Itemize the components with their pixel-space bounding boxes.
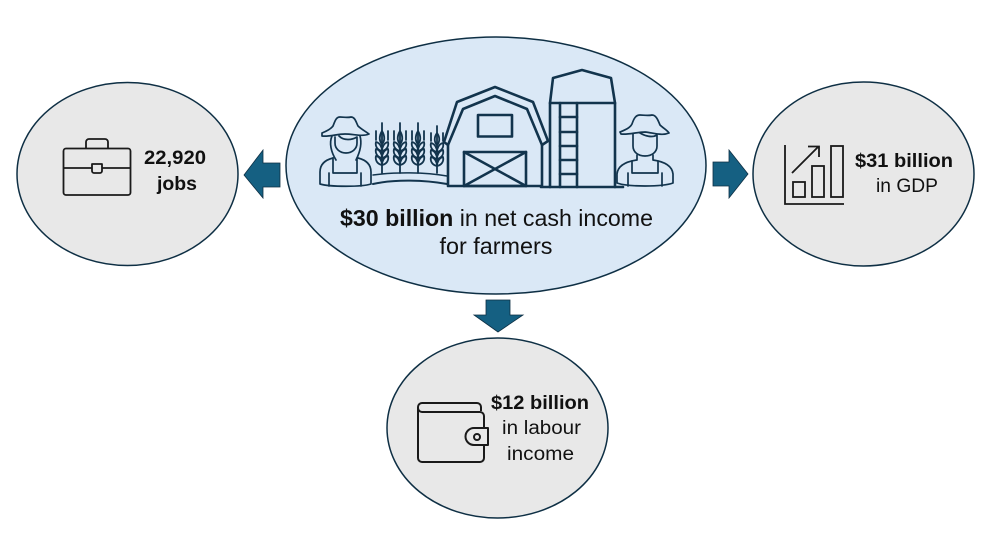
- icon: female farmer: [320, 117, 371, 186]
- text: net cash income: for farmers: [440, 233, 552, 259]
- icon: farm scene: [320, 70, 673, 187]
- arrow: right: [713, 150, 748, 198]
- icon: male farmer: [617, 115, 673, 186]
- panel: labour income: [387, 338, 608, 518]
- text: net cash income: [340, 205, 653, 259]
- panel: net cash income: [286, 37, 706, 294]
- wheat stalk 1: [376, 123, 388, 173]
- text: labour income stat: [491, 393, 589, 465]
- icon: silo: [541, 70, 623, 187]
- text: labour income stat: in labour: [502, 418, 582, 439]
- wheat stalk 2: [394, 123, 406, 173]
- text: jobs stat: 22,920: [144, 148, 206, 169]
- text: GDP stat: in GDP: [876, 176, 938, 197]
- text: labour income stat: $12 billion: [491, 393, 589, 414]
- arrow: down: [474, 300, 523, 332]
- text: labour income stat: income: [507, 444, 574, 465]
- arrow: left: [244, 150, 280, 198]
- icon: briefcase: [64, 139, 130, 195]
- panel: jobs: [17, 82, 238, 266]
- text: jobs stat: [144, 148, 206, 195]
- icon: bar chart: [785, 145, 844, 204]
- icon: barn: [444, 87, 548, 186]
- text: net cash income: $30 billion in net cash income: [340, 205, 653, 231]
- wheat stalk 4: [431, 126, 443, 173]
- text: jobs stat: jobs: [156, 174, 197, 195]
- icon: wallet: [418, 403, 488, 462]
- text: GDP stat: [855, 151, 953, 197]
- wheat stalk 3: [412, 123, 424, 173]
- icon: wheat: [373, 123, 447, 184]
- text: GDP stat: $31 billion: [855, 151, 953, 172]
- panel: GDP: [753, 82, 974, 266]
